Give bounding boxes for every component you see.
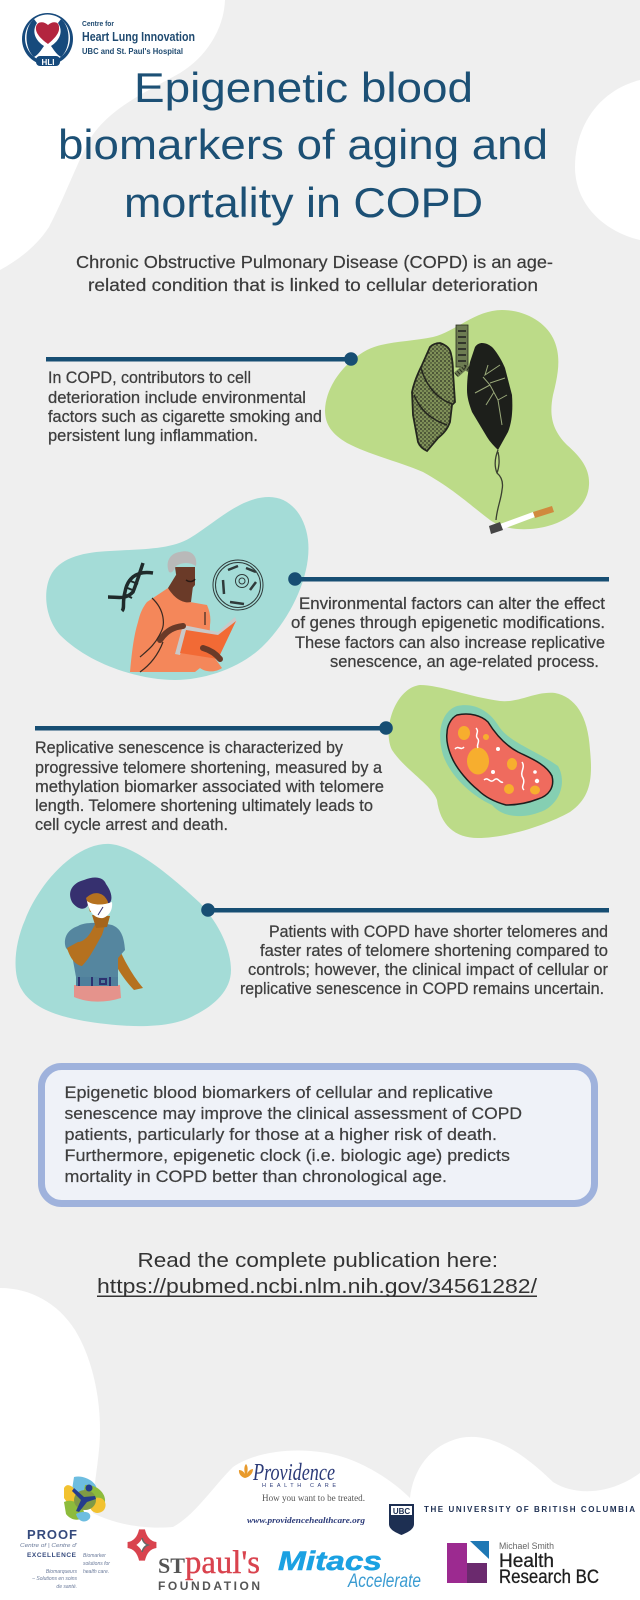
- logo: University of British Columbia: THE UNIVERSITY OF BRITISH COLUMBIA: [424, 1505, 635, 1514]
- callout: conclusion: senescence may improve the clinical assessment of COPD: [64, 1105, 522, 1123]
- text block: [35, 739, 384, 834]
- text block: methylation biomarker associated with telomere: [35, 778, 384, 796]
- logo: PROOF Centre of Excellence: health care.: [83, 1569, 109, 1575]
- text block: [48, 369, 322, 445]
- subtitle: [76, 252, 553, 295]
- text block: [240, 923, 608, 998]
- icon: cigarette: [489, 506, 554, 534]
- subtitle: related condition that is linked to cellular deterioration: [88, 275, 538, 295]
- logo: Michael Smith Health Research BC: Health: [499, 1551, 554, 1572]
- connector line with dot: [46, 352, 358, 366]
- publication link: Read the complete publication here:: [138, 1250, 498, 1272]
- logo: PROOF Centre of Excellence: Biomarker: [83, 1553, 106, 1559]
- text block: Patients with COPD have shorter telomeres and: [269, 923, 608, 941]
- title: Epigenetic blood: [134, 64, 473, 111]
- logo: PROOF Centre of Excellence: [20, 1476, 110, 1590]
- logo: Providence Health Care: www.providencehealthcare.org: [247, 1515, 366, 1525]
- text block: replicative senescence in COPD remains uncertain.: [240, 980, 604, 998]
- logo: Mitacs Accelerate: [278, 1546, 421, 1592]
- callout: conclusion: Epigenetic blood biomarkers of cellular and replicative: [64, 1084, 493, 1102]
- logo: PROOF Centre of Excellence: Biomarqueurs: [46, 1569, 77, 1575]
- logo: Michael Smith Health Research BC: [447, 1541, 599, 1588]
- connector line with dot: [288, 572, 609, 586]
- logo: Michael Smith Health Research BC: Research BC: [499, 1567, 599, 1588]
- logo: Providence Health Care: HEALTH CARE: [262, 1483, 336, 1489]
- logo: St. Paul's Foundation: ST: [158, 1553, 185, 1578]
- panel: replicative senescence: [35, 685, 591, 838]
- title: [58, 64, 548, 226]
- publication link: [97, 1250, 538, 1298]
- icon: cell diagram: [213, 560, 263, 610]
- callout: conclusion: Furthermore, epigenetic clock (i.e. biologic age) predicts: [64, 1147, 510, 1165]
- panel: environmental contributors: [46, 310, 589, 534]
- icon: reader with book: [130, 551, 237, 672]
- text block: cell cycle arrest and death.: [35, 816, 228, 834]
- text block: Environmental factors can alter the effect: [299, 595, 605, 613]
- icon: person wearing mask: [65, 877, 143, 1002]
- logo: PROOF Centre of Excellence: Centre of | Centre d': [20, 1543, 78, 1549]
- title: mortality in COPD: [124, 179, 483, 226]
- green blob with lungs and cigarette: [325, 310, 589, 534]
- text block: senescence, an age-related process.: [330, 653, 599, 671]
- logo: PROOF Centre of Excellence: PROOF: [27, 1527, 77, 1542]
- icon: left lung: [412, 343, 455, 451]
- logo: Centre for Heart Lung Innovation: Centre for: [82, 21, 114, 28]
- text block: Replicative senescence is characterized by: [35, 739, 344, 757]
- callout: conclusion: mortality in COPD better than chronological age.: [64, 1168, 447, 1186]
- logo: PROOF Centre of Excellence: de santé.: [56, 1584, 77, 1590]
- subtitle: Chronic Obstructive Pulmonary Disease (COPD) is an age-: [76, 252, 553, 272]
- callout: conclusion: [42, 1066, 594, 1204]
- text block: deterioration include environmental: [48, 389, 306, 407]
- text block: faster rates of telomere shortening compared to: [260, 942, 608, 960]
- connector line with dot: [35, 721, 393, 735]
- logo: PROOF Centre of Excellence: EXCELLENCE: [27, 1552, 77, 1559]
- text block: In COPD, contributors to cell: [48, 369, 251, 387]
- logo: Mitacs Accelerate: Mitacs: [278, 1546, 382, 1576]
- icon: smoke trail: [495, 450, 502, 520]
- title: biomarkers of aging and: [58, 121, 548, 168]
- green blob with senescent cell: [389, 685, 591, 838]
- logo: Michael Smith Health Research BC: Michael Smith: [499, 1541, 554, 1551]
- logo: Providence Health Care: How you want to be treated.: [262, 1493, 365, 1503]
- logo: Centre for Heart Lung Innovation: UBC and St. Paul's Hospital: [82, 47, 183, 56]
- logo: St. Paul's Foundation: paul's: [185, 1545, 260, 1581]
- teal blob with reader, DNA and cell: [46, 497, 308, 680]
- logo: PROOF Centre of Excellence: – Solutions en soins: [31, 1576, 77, 1582]
- logo: Centre for Heart Lung Innovation: [22, 13, 195, 67]
- text block: [291, 595, 605, 671]
- teal blob with masked patient: [16, 844, 231, 1026]
- text block: controls; however, the clinical impact of cellular or: [248, 961, 608, 979]
- logo: PROOF Centre of Excellence: solutions for: [83, 1561, 110, 1567]
- icon: DNA helix: [108, 563, 153, 611]
- logo: Providence Health Care: [239, 1460, 366, 1525]
- logo: Centre for Heart Lung Innovation: HLI: [42, 58, 54, 67]
- icon: trachea and bronchi: [456, 325, 483, 377]
- logo: University of British Columbia: UBC: [393, 1507, 410, 1516]
- logo: St. Paul's Foundation: [128, 1530, 260, 1593]
- panel: epigenetic modifications: [46, 497, 609, 680]
- text block: These factors can also increase replicative: [295, 634, 605, 652]
- text block: progressive telomere shortening, measured by a: [35, 759, 383, 777]
- connector line with dot: [201, 903, 609, 917]
- logo: St. Paul's Foundation: FOUNDATION: [158, 1579, 260, 1593]
- publication link: https://pubmed.ncbi.nlm.nih.gov/34561282/: [97, 1276, 538, 1298]
- callout: conclusion: patients, particularly for those at a higher risk of death.: [64, 1126, 497, 1144]
- icon: right lung: [467, 343, 512, 450]
- text block: factors such as cigarette smoking and: [48, 408, 322, 426]
- panel: COPD patients: [16, 844, 609, 1026]
- logo: Mitacs Accelerate: Accelerate: [347, 1571, 421, 1592]
- logo: University of British Columbia: [389, 1504, 635, 1535]
- text block: length. Telomere shortening ultimately leads to: [35, 797, 373, 815]
- logo: Centre for Heart Lung Innovation: Heart Lung Innovation: [82, 30, 195, 44]
- text block: persistent lung inflammation.: [48, 427, 258, 445]
- logo: Providence Health Care: Providence: [252, 1460, 335, 1486]
- text block: of genes through epigenetic modifications.: [291, 614, 605, 632]
